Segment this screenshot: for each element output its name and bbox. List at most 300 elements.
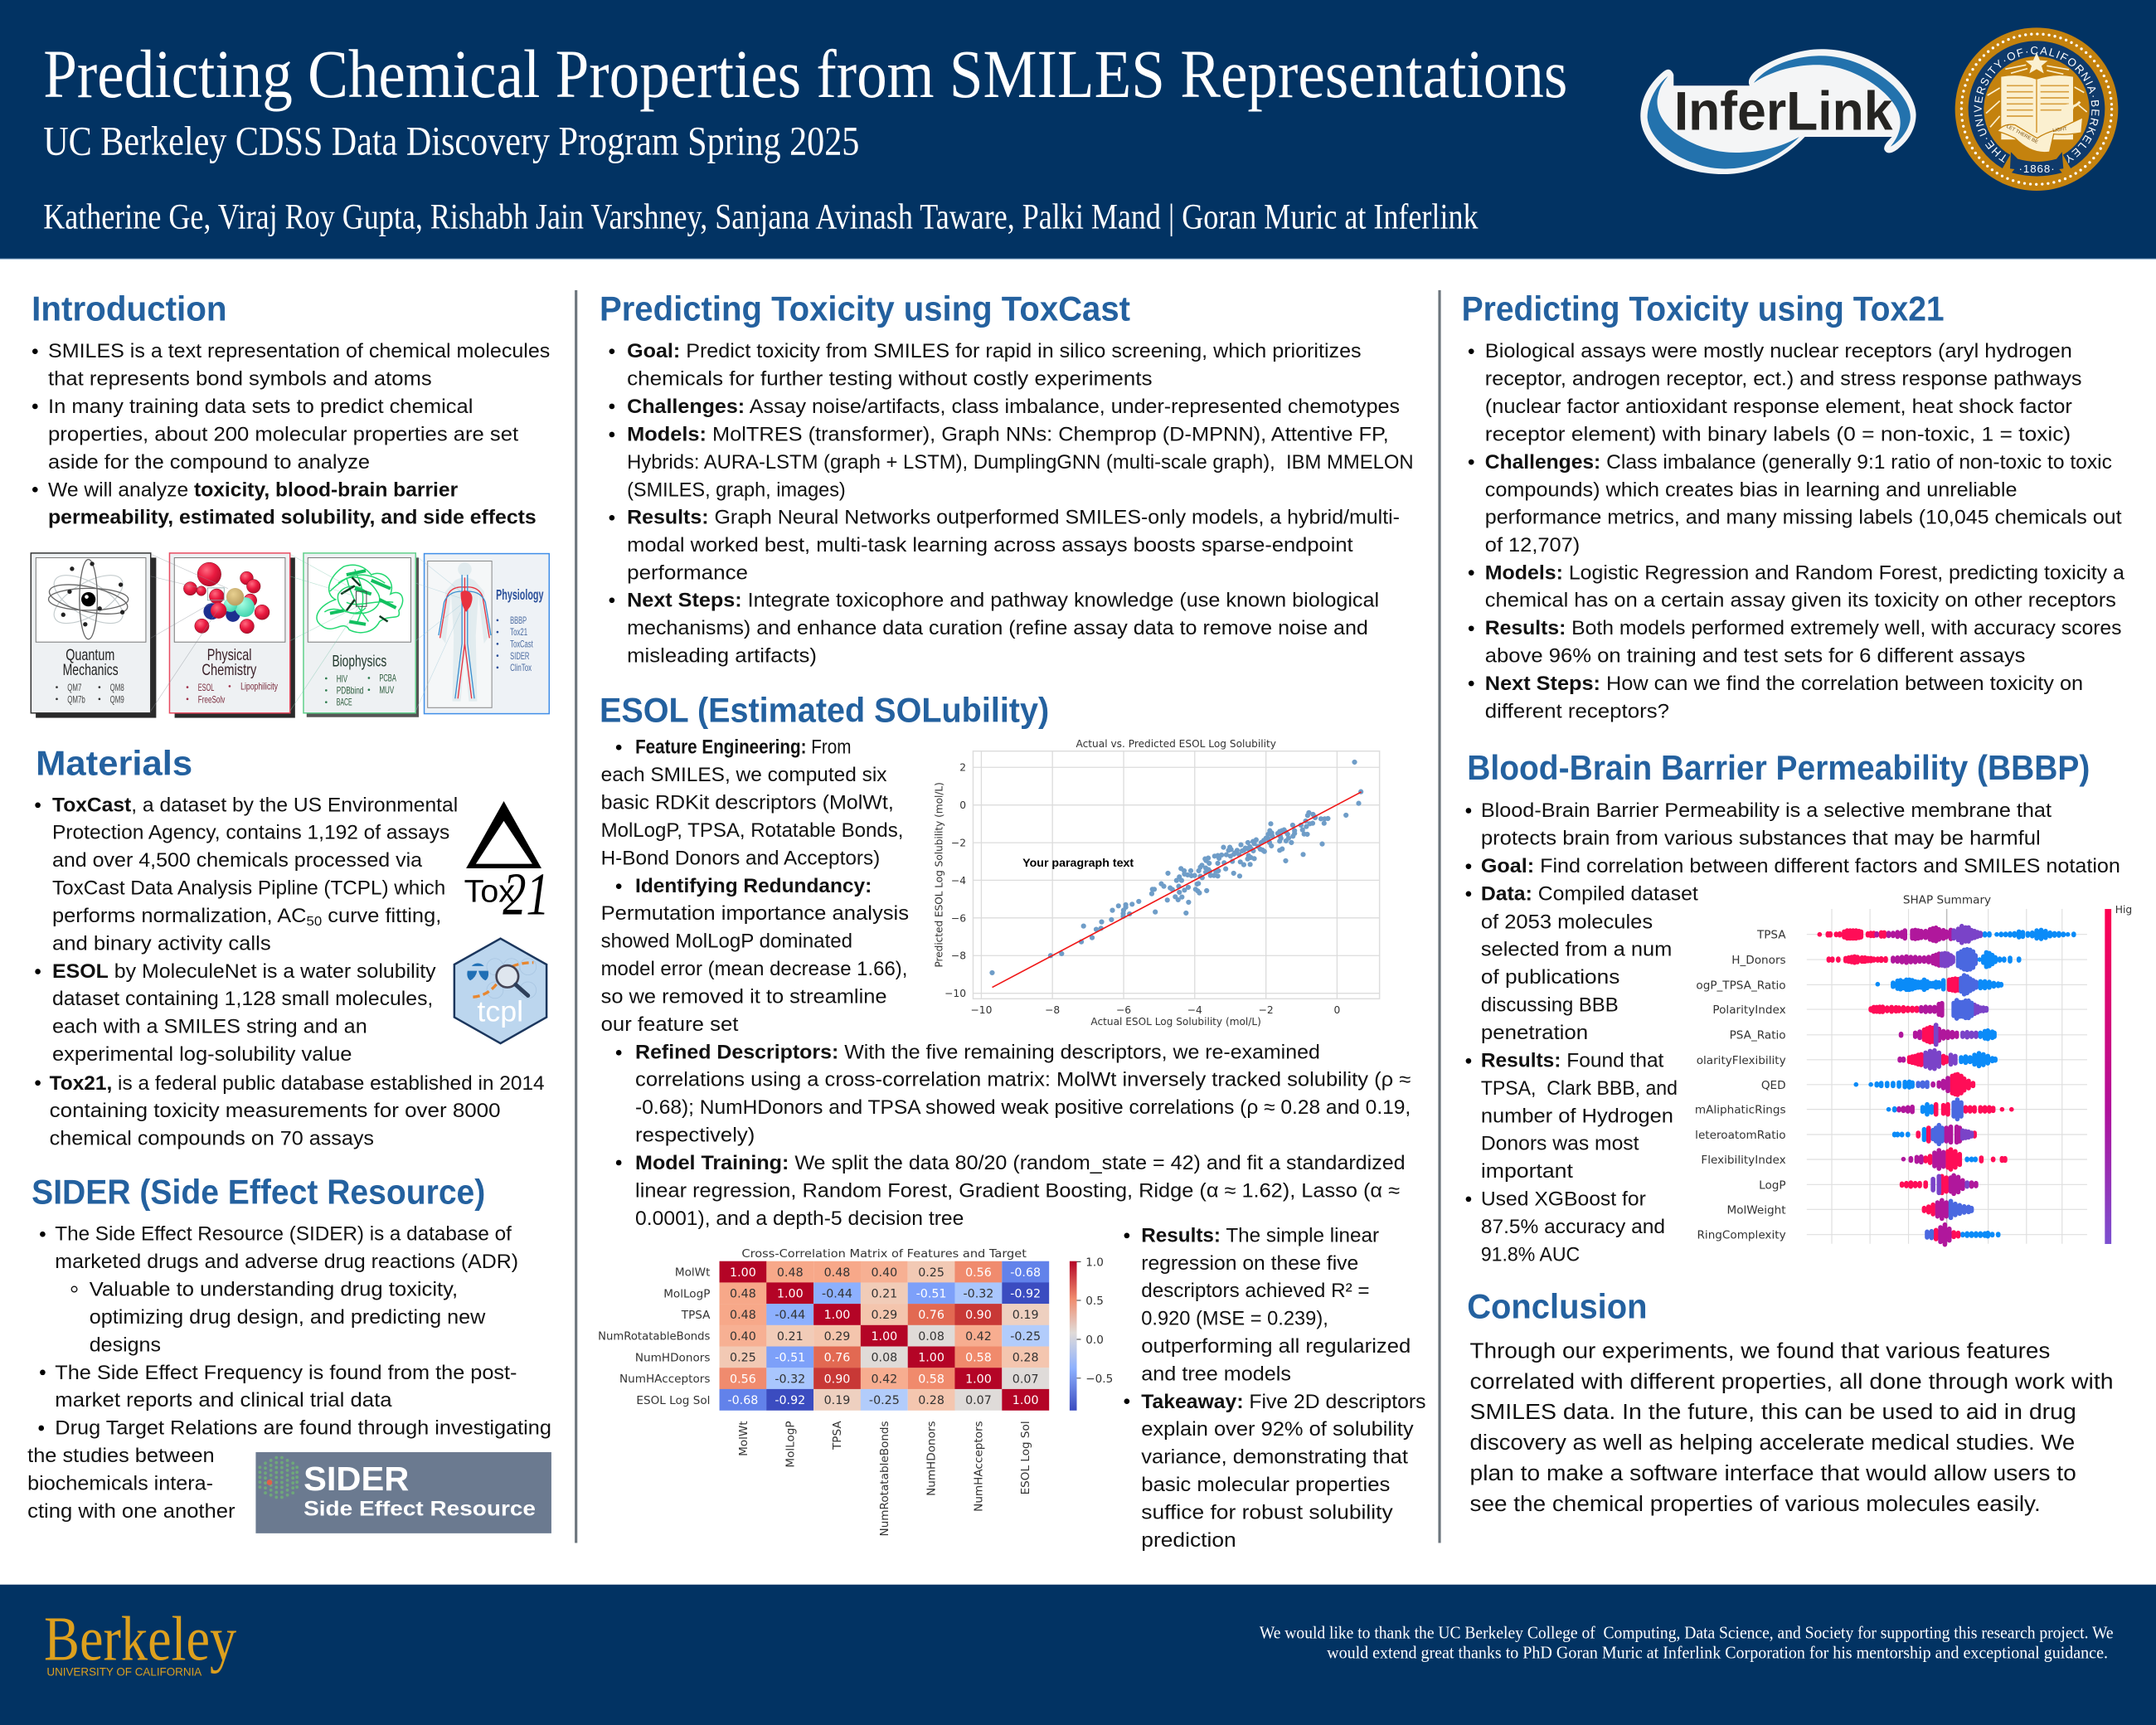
SHAP feature labels [1695,929,1786,1242]
heatmap values: 0.42 [871,1373,897,1386]
heatmap values: -0.25 [1010,1330,1041,1344]
text block: materials bullets: and over 4,500 chemicals processed via [52,849,423,872]
scatter chart: actual vs predicted ESOL solubility: 0 [959,799,966,811]
heatmap values: 0.40 [871,1266,897,1280]
SHAP colorbar [2105,904,2132,1244]
card: quantum mechanics: QM9 [110,693,124,705]
SHAP feature labels: leteroatomRatio [1695,1129,1786,1142]
scatter chart: actual vs predicted ESOL solubility: −10 [944,988,966,999]
heatmap values: 0.21 [777,1330,804,1344]
text block: Tox21 bullets: Models: Logistic Regression and Random Forest, predicting toxicity a [1485,561,2125,584]
logo: Tox21 [464,801,550,928]
heatmap values: 0.21 [871,1287,897,1300]
card: biophysics: MUV [379,684,394,696]
text block: ToxCast bullets: Goal: Predict toxicity from SMILES for rapid in silico screening, which prioritizes [627,340,1362,362]
text block: ESOL left bullets: Model Training: We split the data 80/20 (random_state = 42) and fit a standardized [635,1152,1406,1174]
text block: conclusion: Through our experiments, we found that various features [1470,1339,2050,1363]
text block: SIDER bullets: cting with one another [27,1500,236,1523]
text block: ESOL left bullets: -0.68); NumHDonors and TPSA showed weak positive correlations (ρ ≈ 0.28 and 0.19, [635,1096,1411,1119]
heatmap values: -0.51 [775,1352,805,1365]
text block: Tox21 bullets: above 96% on training and test sets for 6 different assays [1485,645,2026,668]
heatmap values: 0.19 [1012,1309,1039,1322]
heatmap column labels: TPSA [831,1421,844,1450]
heatmap values [727,1266,1041,1407]
text block: SIDER bullets: The Side Effect Frequency is found from the post- [55,1362,517,1384]
heatmap row labels: MolLogP [663,1287,710,1300]
scatter chart: actual vs predicted ESOL solubility: Actual vs. Predicted ESOL Log Solubility [1076,737,1276,750]
heatmap row labels: MolWt [675,1266,710,1280]
card: physical chemistry: Chemistry [202,662,257,679]
acknowledgements: We would like to thank the UC Berkeley College of Computing, Data Science, and Society for supporting this research project. We [1260,1623,2114,1643]
logo: Berkeley wordmark: Berkeley [44,1604,236,1674]
heatmap values: 0.42 [965,1330,992,1344]
panel: conclusion [1467,1286,2114,1516]
text block: Tox21 bullets: performance metrics, and many missing labels (10,045 chemicals out [1485,507,2122,529]
text block: conclusion: SMILES data. In the future, this can be used to aid in drug [1470,1401,2076,1424]
heatmap values: 1.00 [730,1266,756,1280]
text block: materials bullets: performs normalization, AC [52,905,291,927]
heatmap values: 1.00 [824,1309,850,1322]
scatter chart: actual vs predicted ESOL solubility: Predicted ESOL Log Solubility (mol/L) [933,782,945,968]
card: physiology: Tox21 [510,626,527,638]
heatmap: cross-correlation matrix [598,1247,1113,1536]
text block: ESOL left bullets: basic RDKit descriptors (MolWt, [601,791,894,814]
text block: ESOL left bullets: so we removed it to streamline [601,985,887,1008]
SHAP colorbar: Hig [2115,904,2132,916]
heatmap row labels: NumHAcceptors [619,1373,710,1386]
text block: ESOL results and takeaway: explain over 92% of solubility [1141,1418,1414,1441]
logo: tcpl hexagon: tcpl [477,996,523,1028]
text block: materials bullets: Tox21, is a federal public database established in 2014 [50,1072,545,1095]
heatmap row labels [598,1266,711,1407]
text block: ESOL results and takeaway: suffice for robust solubility [1141,1501,1393,1523]
header band [0,0,2156,260]
text block: SIDER bullets: market reports and clinical trial data [55,1389,392,1412]
heatmap values: -0.92 [1010,1287,1041,1300]
text block: Tox21 bullets: Next Steps: How can we find the correlation between toxicity on [1485,673,2083,695]
acknowledgements [1260,1623,2114,1663]
text block: SIDER bullets [27,1223,551,1523]
card: physical chemistry [169,553,295,718]
logo: UC Berkeley seal: ·1868· [2019,163,2055,175]
card: physiology: BBBP [510,615,527,626]
heatmap values: -0.92 [775,1394,805,1407]
scatter points [992,762,1361,973]
card: physical chemistry: Physical [207,647,251,664]
footer band [0,1585,2156,1725]
scatter chart: actual vs predicted ESOL solubility: −2 [951,838,966,849]
heatmap column labels: NumRotatableBonds [878,1421,891,1536]
card: physical chemistry: Lipophilicity [240,681,278,692]
text block: ESOL left bullets: Refined Descriptors: With the five remaining descriptors, we re-examined [635,1041,1320,1063]
SHAP feature labels: RingComplexity [1697,1229,1786,1242]
text block: ESOL left bullets: model error (mean decrease 1.66), [601,958,907,980]
text block: BBBP bullets: number of Hydrogen [1481,1105,1673,1127]
text block: BBBP bullets: TPSA, Clark BBB, and [1481,1077,1678,1100]
logo: SIDER: Side Effect Resource [303,1498,536,1521]
heatmap values: 0.76 [824,1352,850,1365]
scatter chart: actual vs predicted ESOL solubility [933,737,1380,1028]
scatter chart: actual vs predicted ESOL solubility: −4 [951,875,966,887]
title: Predicting Chemical Properties from SMILES Representations [43,36,1567,112]
heatmap values: 0.76 [918,1309,944,1322]
text block: ESOL left bullets: our feature set [601,1013,739,1036]
heatmap values: 1.00 [1012,1394,1039,1407]
heatmap values: -0.51 [916,1287,947,1300]
text block: BBBP bullets: Data: Compiled dataset [1481,882,1698,905]
text block: BBBP bullets: Donors was most [1481,1133,1639,1155]
text block: materials bullets: ToxCast Data Analysis Pipline (TCPL) which [52,877,445,899]
text block: Tox21 bullets: receptor, androgen receptor, ect.) and stress response pathways [1485,368,2082,391]
scatter chart: actual vs predicted ESOL solubility: −10 [970,1004,992,1016]
text block: ESOL left bullets: Feature Engineering: From [635,736,851,759]
scatter chart: actual vs predicted ESOL solubility: −8 [1045,1004,1060,1016]
heatmap values: 0.58 [918,1373,944,1386]
text block: Tox21 bullets: receptor element) with binary labels (0 = non-toxic, 1 = toxic) [1485,423,2071,445]
heatmap values: 1.00 [871,1330,897,1344]
heatmap colorbar [1070,1256,1113,1411]
heatmap column labels: MolWt [737,1421,750,1456]
text block: BBBP bullets: Blood-Brain Barrier Permeability is a selective membrane that [1481,799,2052,822]
heatmap values: 0.90 [824,1373,850,1386]
text block: BBBP bullets: of publications [1481,966,1619,989]
text block: ESOL left bullets: 0.0001), and a depth-5 decision tree [635,1208,964,1230]
logo: Berkeley wordmark: UNIVERSITY OF CALIFORNIA [46,1665,202,1679]
card: biophysics: PDBbind [337,685,363,697]
text block: introduction bullets: We will analyze toxicity, blood-brain barrier [48,479,458,501]
card: quantum mechanics [31,553,156,718]
heatmap values: 0.07 [1012,1373,1039,1386]
SHAP feature labels: FlexibilityIndex [1701,1154,1786,1167]
text block: materials bullets: Protection Agency, contains 1,192 of assays [52,821,449,843]
text block: BBBP bullets: Used XGBoost for [1481,1188,1646,1211]
heatmap values: 0.48 [730,1309,756,1322]
heading: ToxCast: Predicting Toxicity using ToxCast [600,289,1130,328]
text block: conclusion: correlated with different properties, all done through work with [1470,1370,2114,1393]
text block: materials bullets: and binary activity calls [52,932,271,955]
SHAP feature labels: TPSA [1756,929,1786,942]
text block: conclusion: see the chemical properties of various molecules easily. [1470,1493,2041,1516]
text block: ESOL results and takeaway: basic molecular properties [1141,1474,1390,1496]
heatmap values: -0.32 [964,1287,993,1300]
text block: introduction bullets: properties, about 200 molecular properties are set [48,423,519,445]
heatmap values: 0.56 [965,1266,992,1280]
authors: Katherine Ge, Viraj Roy Gupta, Rishabh Jain Varshney, Sanjana Avinash Taware, Palki Mand | Goran Muric at Inferlink [43,197,1479,236]
subtitle: UC Berkeley CDSS Data Discovery Program Spring 2025 [43,119,859,164]
heatmap values: -0.44 [822,1287,852,1300]
panel: ESOL [598,691,1426,1552]
heatmap values: 0.48 [777,1266,804,1280]
heatmap values: 0.08 [871,1352,897,1365]
text block: materials bullets: ESOL by MoleculeNet is a water solubility [52,960,436,983]
logo: InferLink: InferLink [1674,81,1893,143]
card: physiology [425,554,549,714]
heatmap colorbar: −0.5 [1085,1373,1113,1386]
text block: introduction bullets: permeability, estimated solubility, and side effects [48,507,537,529]
logo: UC Berkeley seal: LET THERE BE [2005,124,2038,145]
text block: Tox21 bullets: of 12,707) [1485,534,1580,556]
text block: conclusion [1470,1339,2114,1516]
text block: BBBP bullets: Results: Found that [1481,1050,1664,1072]
logo: Tox21: 21 [503,861,550,928]
card: physiology: SIDER [510,650,530,662]
text block: Tox21 bullets: chemical has on a certain assay given its toxicity on other receptors [1485,590,2116,612]
heatmap colorbar: 1.0 [1085,1256,1104,1269]
beeswarm chart: SHAP summary [1695,893,2132,1245]
card: quantum mechanics: QM7 [67,682,82,693]
heading: Introduction: Introduction [32,289,227,328]
text block: BBBP bullets [1466,799,2120,1266]
card: quantum mechanics: Mechanics [63,662,119,679]
text block: ESOL left bullets: Permutation importance analysis [601,902,909,925]
card: biophysics: HIV [337,673,347,684]
text block: ToxCast bullets: mechanisms) and enhance data curation (refine assay data to remove noise and [627,617,1368,639]
text block: ToxCast bullets: performance [627,561,748,584]
acknowledgements: would extend great thanks to PhD Goran Muric at Inferlink Corporation for his mentorship and exceptional guidance. [1327,1643,2108,1663]
heatmap values: 0.08 [918,1330,944,1344]
heading: SIDER: SIDER (Side Effect Resource) [32,1173,485,1212]
text block: ToxCast bullets [609,340,1414,668]
SHAP feature labels: H_Donors [1731,954,1786,967]
heading: Tox21: Predicting Toxicity using Tox21 [1462,289,1945,328]
scatter chart: actual vs predicted ESOL solubility: −4 [1187,1004,1202,1016]
logo: UC Berkeley seal [1955,27,2118,191]
heatmap values: -0.44 [775,1309,805,1322]
text block: ESOL results and takeaway: Results: The simple linear [1141,1224,1379,1246]
SHAP feature labels: LogP [1759,1178,1786,1192]
text block: ESOL results and takeaway [1124,1224,1426,1552]
text block: ToxCast bullets: misleading artifacts) [627,645,817,668]
text block: materials bullets: ToxCast, a dataset by the US Environmental [52,794,458,816]
heatmap column labels [737,1421,1032,1536]
text block: SIDER bullets: marketed drugs and adverse drug reactions (ADR) [55,1251,518,1273]
text block: ESOL results and takeaway: descriptors achieved R² = [1141,1280,1370,1302]
heatmap values: 0.48 [730,1287,756,1300]
heading: Conclusion: Conclusion [1467,1286,1647,1325]
logo: UC Berkeley seal: LIGHT [2052,127,2068,134]
text block: ESOL results and takeaway: 0.920 (MSE = 0.239), [1141,1308,1328,1330]
panel: BBBP [1466,748,2132,1266]
SHAP feature labels: PolarityIndex [1712,1003,1786,1017]
card: biophysics: Biophysics [332,654,386,671]
beeswarm dots [1819,926,2074,1245]
text block: SIDER bullets: Valuable to understanding drug toxicity, [90,1278,458,1300]
panel: predicting toxicity using ToxCast [600,289,1414,668]
figure: MoleculeNet dataset categories [31,553,549,718]
text block: Tox21 bullets: Biological assays were mostly nuclear receptors (aryl hydrogen [1485,340,2072,362]
heatmap values: 0.07 [965,1394,992,1407]
heatmap values: 0.25 [730,1352,756,1365]
heatmap column labels: NumHDonors [925,1421,939,1496]
text block: Tox21 bullets: (nuclear factor antioxidant response element, heat shock factor [1485,396,2072,418]
heatmap column labels: MolLogP [784,1421,797,1468]
text block: ESOL left bullets: Identifying Redundancy: [635,875,872,897]
text block: ESOL left bullets: correlations using a cross-correlation matrix: MolWt inversely tracked solubility (ρ ≈ [635,1069,1411,1091]
text block: ESOL left bullets [601,736,1411,1230]
text block: ESOL left bullets: showed MolLogP dominated [601,931,852,953]
text block: SIDER bullets: the studies between [27,1445,215,1467]
logo: Tox21: Tox [464,873,515,909]
text block: ToxCast bullets: modal worked best, multi-task learning across assays boosts sparse-endpoint [627,534,1353,556]
text block: Tox21 bullets [1469,340,2125,722]
text block: SIDER bullets: designs [90,1334,161,1356]
SHAP feature labels: QED [1761,1079,1786,1092]
scatter chart: actual vs predicted ESOL solubility: −6 [951,912,966,924]
text block: ESOL left bullets: H-Bond Donors and Acceptors) [601,847,880,869]
text block: ToxCast bullets: Results: Graph Neural Networks outperformed SMILES-only models, a hybrid/multi- [627,507,1400,529]
text block: BBBP bullets: of 2053 molecules [1481,911,1653,933]
text block: materials bullets: chemical compounds on 70 assays [50,1128,374,1150]
heatmap values: 0.29 [871,1309,897,1322]
text block: ESOL results and takeaway: Takeaway: Five 2D descriptors [1141,1391,1426,1413]
card: physical chemistry: FreeSolv [198,693,225,705]
panel: predicting toxicity using Tox21 [1462,289,2125,722]
heatmap values: 0.56 [730,1373,756,1386]
heatmap: cross-correlation matrix: Cross-Correlation Matrix of Features and Target [741,1247,1027,1261]
SHAP feature labels: ogP_TPSA_Ratio [1696,979,1786,992]
card: quantum mechanics: QM7b [67,693,85,705]
text block: SIDER bullets: optimizing drug design, and predicting new [90,1306,486,1329]
text block: ESOL left bullets: linear regression, Random Forest, Gradient Boosting, Ridge (α ≈ 1.62), Lasso (α ≈ [635,1179,1400,1202]
text block: ToxCast bullets: Hybrids: AURA-LSTM (graph + LSTM), DumplingGNN (multi-scale graph), IBM MMELON [627,451,1414,474]
heatmap colorbar: 0.5 [1085,1295,1104,1308]
text block: materials bullets: containing toxicity measurements for over 8000 [50,1100,501,1122]
heatmap values: 1.00 [965,1373,992,1386]
text block: introduction bullets: aside for the compound to analyze [48,451,370,474]
heading: Materials: Materials [36,743,192,782]
card: biophysics: BACE [337,697,352,708]
heatmap column labels: NumHAcceptors [972,1421,985,1512]
scatter chart: actual vs predicted ESOL solubility: 0 [1333,1004,1340,1016]
text block: ESOL results and takeaway: regression on these five [1141,1252,1358,1275]
text block: conclusion: plan to make a software interface that would allow users to [1470,1462,2076,1485]
text block: ESOL results and takeaway: outperforming all regularized [1141,1335,1411,1358]
SHAP feature labels: mAliphaticRings [1695,1104,1786,1117]
text block: ESOL left bullets: each SMILES, we computed six [601,764,887,786]
text block: Tox21 bullets: different receptors? [1485,700,1669,722]
logo: InferLink [1640,49,1916,174]
text block: ESOL left bullets: respectively) [635,1124,755,1146]
card: physiology: Physiology [496,586,544,603]
text block: Tox21 bullets: Results: Both models performed extremely well, with accuracy scores [1485,617,2122,639]
heatmap colorbar: 0.0 [1085,1334,1104,1347]
heatmap values: 1.00 [777,1287,804,1300]
heatmap values: 0.90 [965,1309,992,1322]
text block: materials bullets: dataset containing 1,128 small molecules, [52,988,433,1010]
text block: ESOL results and takeaway: and tree models [1141,1363,1291,1385]
text block: introduction bullets [32,340,550,529]
heatmap values: 0.48 [824,1266,850,1280]
beeswarm chart: SHAP summary: SHAP Summary [1903,893,1991,906]
text block: conclusion: discovery as well as helping accelerate medical studies. We [1470,1431,2075,1455]
text block: ToxCast bullets: Models: MolTRES (transformer), Graph NNs: Chemprop (D-MPNN), Attentive FP, [627,423,1389,445]
heatmap values: 0.58 [965,1352,992,1365]
text block: ToxCast bullets: chemicals for further testing without costly experiments [627,368,1153,391]
card: biophysics [303,553,419,717]
heatmap row labels: NumHDonors [635,1351,710,1364]
heatmap values: 0.40 [730,1330,756,1344]
text block: SIDER bullets: Drug Target Relations are found through investigating [55,1416,551,1439]
heatmap values: 0.25 [918,1266,944,1280]
card: physiology: ToxCast [510,638,533,649]
heatmap column labels: ESOL Log Sol [1019,1421,1032,1494]
text block: BBBP bullets: important [1481,1160,1573,1183]
text block: Tox21 bullets: Challenges: Class imbalance (generally 9:1 ratio of non-toxic to toxic [1485,451,2112,474]
text block: Tox21 bullets: compounds) which creates bias in learning and unreliable [1485,479,2018,501]
text block: introduction bullets: that represents bond symbols and atoms [48,368,432,391]
heatmap values: 0.29 [824,1330,850,1344]
scatter chart: actual vs predicted ESOL solubility: −6 [1116,1004,1131,1016]
text block: BBBP bullets: protects brain from various substances that may be harmful [1481,827,2041,849]
text block: BBBP bullets: selected from a num [1481,939,1672,961]
card: biophysics: PCBA [379,673,396,684]
text block: BBBP bullets: discussing BBB [1481,994,1619,1016]
heading: BBBP: Blood-Brain Barrier Permeability (BBBP) [1467,748,2090,787]
heatmap row labels: TPSA [681,1309,711,1322]
text block: materials bullets: curve fitting, [322,905,441,927]
heatmap values: -0.68 [727,1394,758,1407]
text block: materials bullets: each with a SMILES string and an [52,1016,367,1038]
text block: materials bullets [35,794,545,1150]
SHAP feature labels: olarityFlexibility [1697,1054,1786,1067]
heatmap values: -0.32 [775,1373,805,1386]
text block: ESOL left bullets: MolLogP, TPSA, Rotatable Bonds, [601,819,903,842]
text block: materials bullets: experimental log-solubility value [52,1043,352,1066]
regression line [993,792,1362,988]
text block: ToxCast bullets: (SMILES, graph, images) [627,479,846,501]
text block: introduction bullets: In many training data sets to predict chemical [48,396,473,418]
text block: BBBP bullets: penetration [1481,1022,1588,1044]
SHAP feature labels: MolWeight [1727,1203,1786,1217]
SHAP feature labels: PSA_Ratio [1730,1029,1786,1042]
heatmap values: 0.28 [1012,1352,1039,1365]
text block: BBBP bullets: 91.8% AUC [1481,1243,1580,1266]
text block: SIDER bullets: biochemicals intera- [27,1472,213,1494]
heatmap values: 0.28 [918,1394,944,1407]
card: physiology: ClinTox [510,662,532,673]
text block: ToxCast bullets: Next Steps: Integrate toxicophore and pathway knowledge (use known biological [627,590,1379,612]
text block: SIDER bullets: The Side Effect Resource (SIDER) is a database of [55,1223,512,1246]
text block: BBBP bullets: 87.5% accuracy and [1481,1216,1665,1238]
heatmap values: -0.25 [869,1394,900,1407]
text block: ESOL results and takeaway: variance, demonstrating that [1141,1446,1408,1469]
panel: materials [35,743,550,1150]
heatmap values: 1.00 [918,1352,944,1365]
scatter chart: actual vs predicted ESOL solubility: Actual ESOL Log Solubility (mol/L) [1090,1015,1261,1028]
text block: ToxCast bullets: Challenges: Assay noise/artifacts, class imbalance, under-represented chemotypes [627,396,1400,418]
heatmap values: 0.19 [824,1394,850,1407]
card: quantum mechanics: Quantum [66,647,114,664]
heatmap cells [720,1261,1049,1411]
logo: SIDER [255,1452,551,1533]
scatter chart: actual vs predicted ESOL solubility: −2 [1259,1004,1274,1016]
heatmap values: -0.68 [1010,1266,1041,1280]
text block: BBBP bullets: Goal: Find correlation between different factors and SMILES notation [1481,855,2120,877]
scatter chart: actual vs predicted ESOL solubility: 2 [959,762,966,774]
column dividers [575,290,1441,1543]
panel: introduction [32,289,550,529]
text block: introduction bullets: SMILES is a text representation of chemical molecules [48,340,550,362]
card: physical chemistry: ESOL [198,682,215,693]
text block: materials bullets: 50 [307,915,322,929]
heatmap row labels: NumRotatableBonds [598,1330,710,1344]
heatmap row labels: ESOL Log Sol [636,1394,710,1407]
panel: SIDER [27,1173,551,1533]
logo: tcpl hexagon [454,939,546,1043]
text block: ESOL results and takeaway: prediction [1141,1529,1236,1552]
scatter chart: actual vs predicted ESOL solubility: −8 [951,950,966,962]
card: quantum mechanics: QM8 [110,682,124,693]
